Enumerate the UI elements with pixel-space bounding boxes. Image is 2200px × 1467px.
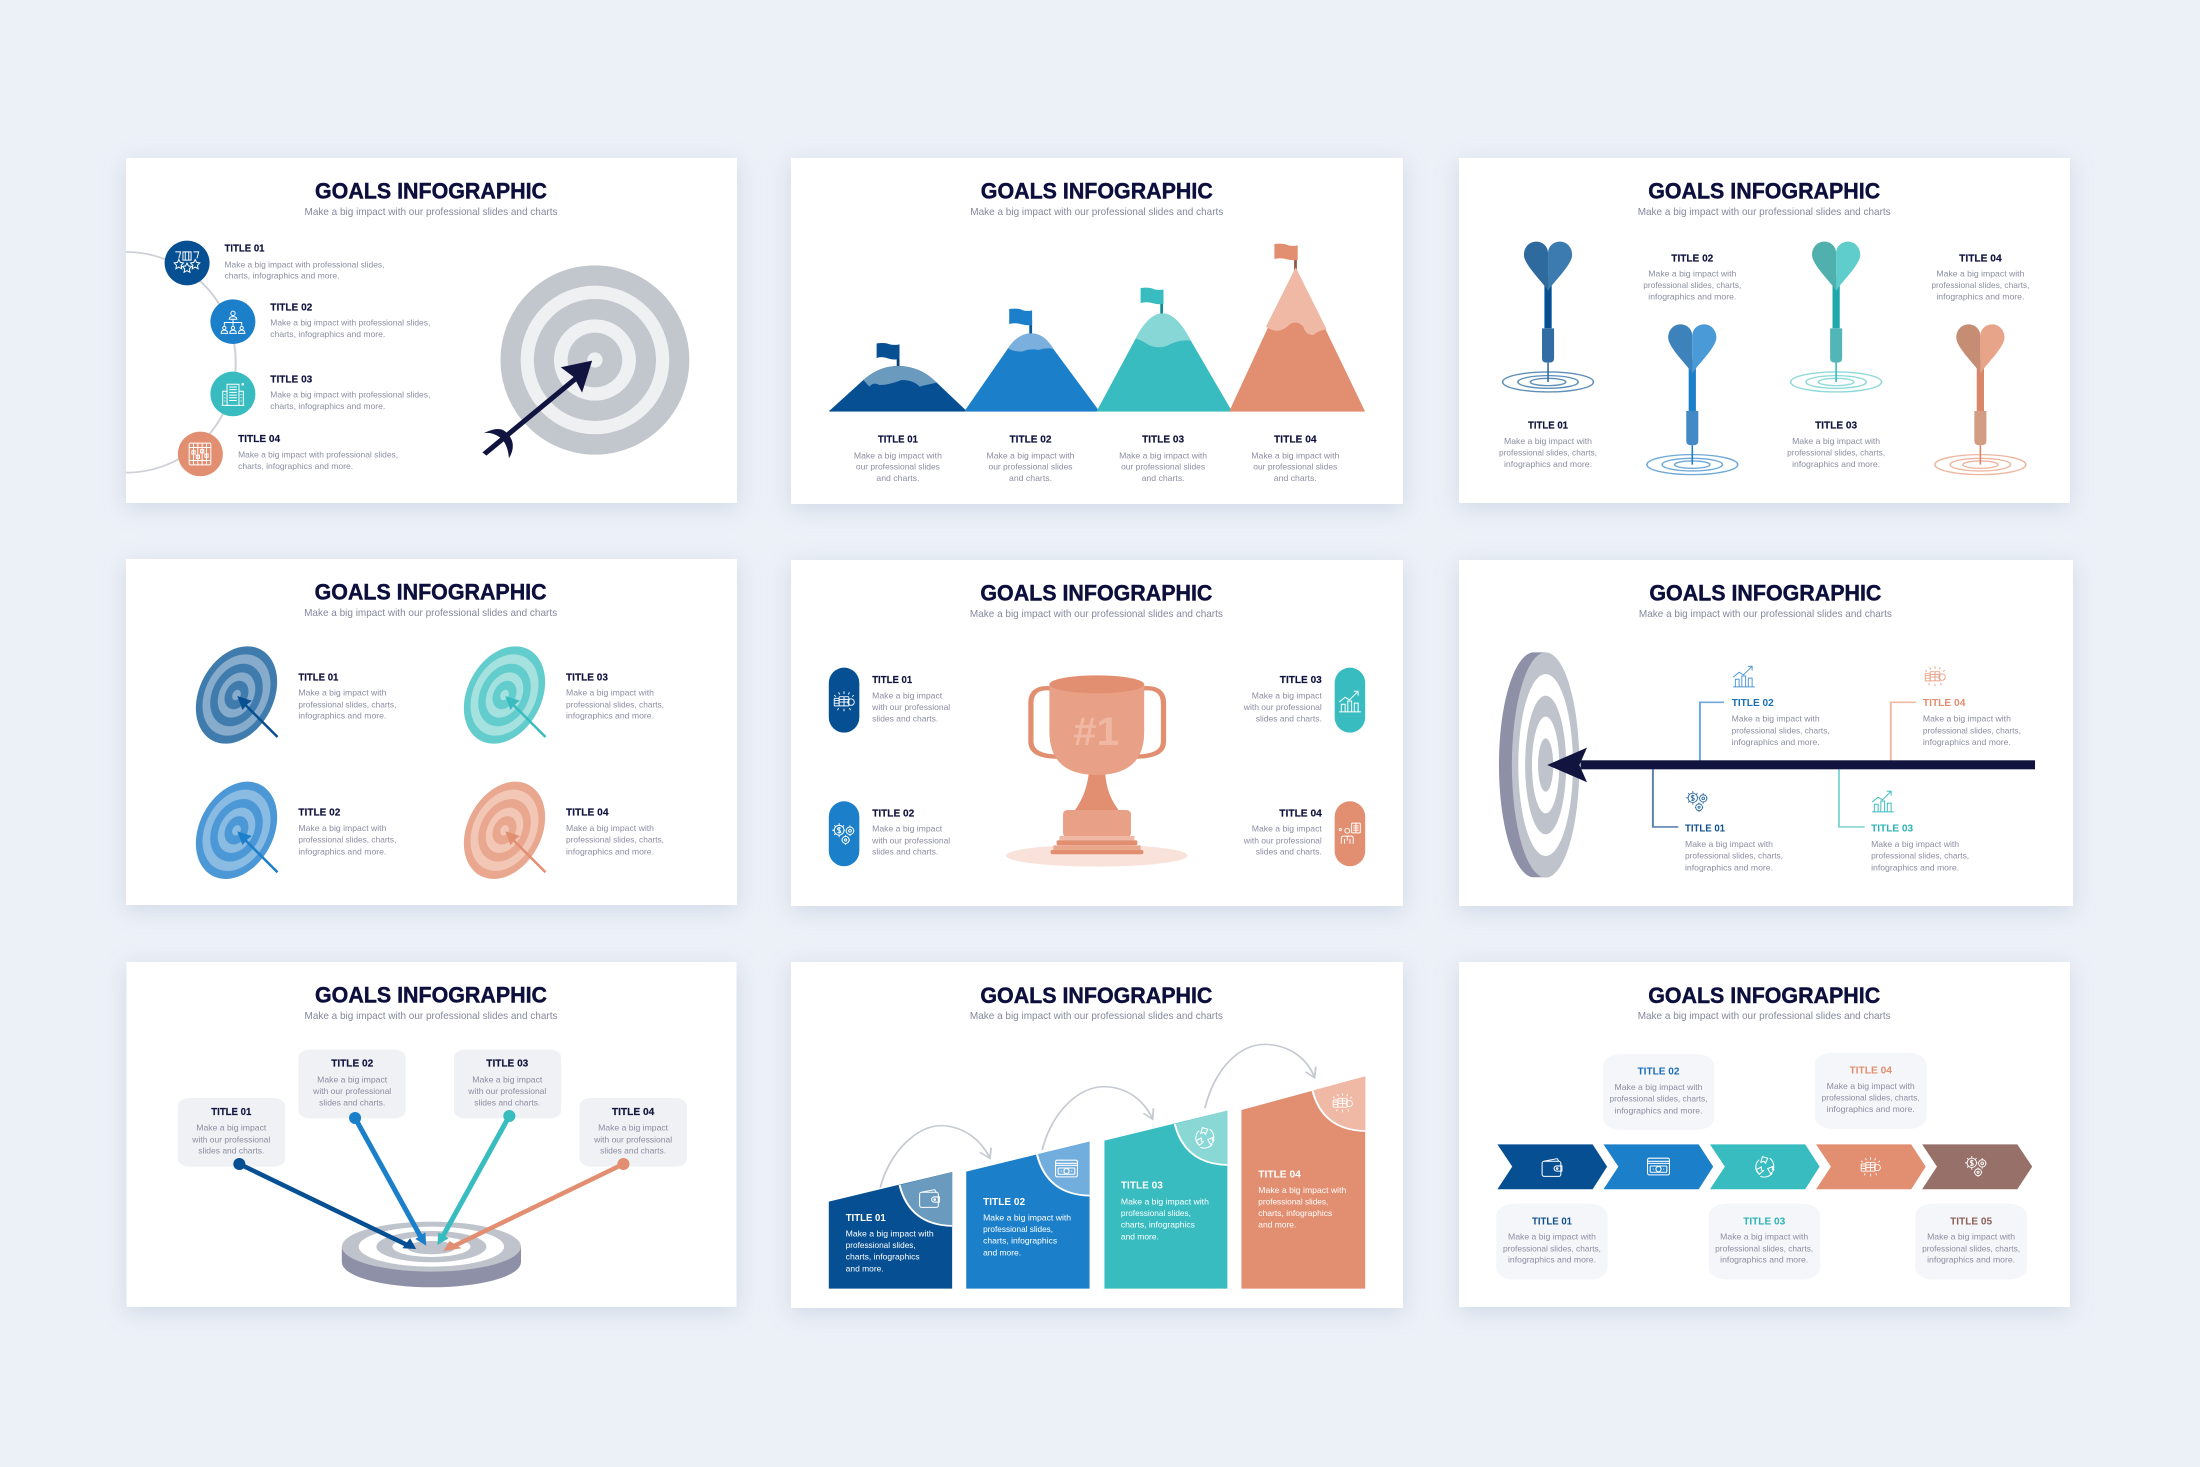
text: title 04: with our professional	[593, 1135, 672, 1144]
text: title 02	[986, 435, 1075, 483]
text: title 02: professional slides, charts,	[1732, 726, 1830, 735]
text: title 02: professional slides, charts,	[1643, 281, 1741, 290]
text: title 03: TITLE 03	[1142, 435, 1184, 446]
text: title 03: Make a big impact with professional slides,	[270, 391, 430, 400]
text: title 02: slides and charts.	[319, 1098, 385, 1107]
icon: coins	[1333, 1093, 1352, 1112]
text: title 03: slides and charts.	[474, 1098, 540, 1107]
text: title 04: Make a big impact with	[1251, 451, 1340, 460]
text: title 01: TITLE 01	[211, 1107, 252, 1118]
icon: gears navy	[1686, 791, 1707, 812]
text: title 04	[1822, 1065, 1920, 1114]
text: title 05: professional slides, charts,	[1922, 1244, 2020, 1253]
target 2	[180, 767, 293, 893]
target 3	[448, 632, 561, 758]
subheading: Make a big impact with our professional slides and charts	[1638, 1010, 1891, 1022]
icon: chart blue	[1733, 666, 1755, 687]
text: title 04: infographics and more.	[566, 847, 654, 856]
text: title 03: TITLE 03	[566, 672, 608, 683]
text: title 02: our professional slides	[988, 463, 1072, 472]
text: title 02: TITLE 02	[1732, 698, 1774, 709]
heading: GOALS INFOGRAPHIC	[980, 581, 1212, 606]
text: title 03: with our professional	[1243, 703, 1322, 712]
text: title 02	[1732, 698, 1830, 747]
subheading: Make a big impact with our professional slides and charts	[304, 1010, 558, 1022]
subheading: Make a big impact with our professional slides and charts	[304, 206, 558, 218]
text: title 03: Make a big impact with	[1792, 437, 1881, 446]
icon: abacus	[189, 443, 211, 465]
panel: tilted targets	[126, 559, 737, 905]
text: title 04: infographics and more.	[1827, 1105, 1915, 1114]
text: title 05: TITLE 05	[1950, 1216, 1992, 1227]
icon: person	[1339, 823, 1360, 844]
text: title 01: professional slides, charts,	[1503, 1244, 1601, 1253]
text: title 02: TITLE 02	[983, 1197, 1025, 1208]
panel: trophy	[791, 560, 1403, 906]
subheading: Make a big impact with our professional slides and charts	[1638, 206, 1891, 218]
text: title 04: Make a big impact with	[1258, 1186, 1347, 1195]
text: title 02: Make a big impact with	[1614, 1083, 1703, 1092]
icon: coins	[834, 691, 854, 711]
icon: coins orange	[1925, 666, 1945, 686]
text: title 01: slides and charts.	[198, 1147, 264, 1156]
text: title 02: TITLE 02	[331, 1059, 374, 1070]
heading: GOALS INFOGRAPHIC	[1648, 983, 1880, 1008]
text: title 04: TITLE 04	[238, 434, 280, 445]
text: title 03: TITLE 03	[486, 1059, 529, 1070]
text: title 02: Make a big impact	[317, 1076, 388, 1085]
text: title 04	[1251, 435, 1340, 483]
text: title 02: TITLE 02	[872, 808, 915, 819]
text: title 03: Make a big impact	[1252, 691, 1323, 700]
text: title 01	[871, 675, 950, 723]
text: title 02: slides and charts.	[872, 848, 938, 857]
text: title 05	[1922, 1216, 2020, 1265]
text: title 01: our professional slides	[856, 463, 940, 472]
text: title 02	[298, 808, 396, 856]
text: title 02: charts, infographics and more.	[270, 330, 385, 339]
text: title 03	[1715, 1216, 1813, 1265]
text: title 03: infographics and more.	[1871, 863, 1959, 872]
heading: GOALS INFOGRAPHIC	[315, 580, 547, 605]
text: title 02: Make a big impact	[872, 825, 943, 834]
text: title 01: infographics and more.	[1504, 460, 1592, 469]
icon: medals	[174, 252, 200, 272]
chevrons and text boxes	[1496, 1053, 2032, 1280]
icon: building	[222, 383, 244, 405]
text: title 01: Make a big impact with professional slides,	[224, 260, 384, 269]
text: title 04: Make a big impact with	[1827, 1082, 1915, 1091]
text: title 01: and more.	[846, 1264, 884, 1273]
text: title 02: Make a big impact with	[1648, 270, 1737, 279]
text: title 04	[1243, 808, 1323, 857]
text: title 04: professional slides, charts,	[1923, 726, 2021, 735]
text: title 01: professional slides, charts,	[298, 700, 396, 709]
heading: GOALS INFOGRAPHIC	[315, 983, 547, 1008]
text: title 03: TITLE 03	[1815, 420, 1857, 431]
mountains chart with flags	[829, 244, 1365, 412]
text: title 03: professional slides,	[1121, 1209, 1191, 1218]
text: title 03: charts, infographics and more.	[270, 402, 385, 411]
text: title 03: and more.	[1121, 1232, 1159, 1241]
trophy label: #1	[1073, 710, 1119, 754]
text: title 03: infographics and more.	[566, 712, 654, 721]
text: title 04: professional slides, charts,	[1931, 281, 2029, 290]
text: title 04	[1923, 698, 2021, 747]
text: title 01: TITLE 01	[1685, 824, 1725, 835]
text: title 03: professional slides, charts,	[1715, 1244, 1813, 1253]
text: title 04: TITLE 04	[1849, 1065, 1892, 1076]
text: title 02: TITLE 02	[1010, 435, 1052, 446]
text: title 01: Make a big impact	[196, 1124, 267, 1133]
panel: chevron process	[1459, 962, 2070, 1307]
text: title 03: professional slides, charts,	[1871, 852, 1969, 861]
text: title 03: Make a big impact with	[1871, 840, 1960, 849]
text: title 04	[566, 808, 664, 856]
text: title 04: Make a big impact with	[566, 824, 654, 833]
text: title 05: infographics and more.	[1927, 1256, 2015, 1265]
text: title 01: with our professional	[191, 1135, 270, 1144]
text: title 03: TITLE 03	[270, 374, 313, 385]
subheading: Make a big impact with our professional slides and charts	[970, 1010, 1223, 1022]
text: title 04: TITLE 04	[1959, 253, 2002, 264]
heading: GOALS INFOGRAPHIC	[980, 983, 1212, 1008]
icon: gears	[1965, 1156, 1986, 1177]
icon: money	[1056, 1160, 1077, 1177]
text: title 04: professional slides,	[1258, 1197, 1328, 1206]
panel: side target with long arrow	[1459, 560, 2073, 906]
text: title 04: charts, infographics and more.	[238, 462, 353, 471]
text: title 01: with our professional	[871, 703, 950, 712]
text: title 01	[191, 1107, 270, 1156]
text: title 04: TITLE 04	[1274, 435, 1317, 446]
text: title 02: Make a big impact with	[986, 451, 1075, 460]
text: title 03: Make a big impact with	[1121, 1197, 1209, 1206]
text: title 02: Make a big impact with professional slides,	[270, 319, 430, 328]
text: title 03: TITLE 03	[1280, 675, 1322, 686]
text: title 02	[983, 1197, 1072, 1257]
text: title 04: professional slides, charts,	[566, 836, 664, 845]
text: title 03	[270, 374, 430, 411]
text: title 01	[224, 243, 384, 281]
text: title 01: TITLE 01	[1528, 420, 1568, 431]
text: title 04: and charts.	[1274, 474, 1317, 483]
text: title 03	[467, 1059, 546, 1107]
text: title 01: TITLE 01	[224, 243, 265, 254]
text: title 03: professional slides, charts,	[1787, 448, 1885, 457]
text: title 04: and more.	[1258, 1221, 1296, 1230]
text: title 01: Make a big impact with	[298, 689, 387, 698]
text: title 03: TITLE 03	[1871, 824, 1913, 835]
heading: GOALS INFOGRAPHIC	[981, 179, 1213, 204]
text: title 02: with our professional	[312, 1087, 391, 1096]
text: title 04: TITLE 04	[612, 1107, 655, 1118]
text: title 01: TITLE 01	[1532, 1216, 1572, 1227]
subheading: Make a big impact with our professional slides and charts	[970, 206, 1223, 218]
text: title 02: with our professional	[871, 836, 950, 845]
text: title 02: infographics and more.	[1614, 1106, 1702, 1115]
text: title 01: professional slides, charts,	[1499, 448, 1597, 457]
text: title 02: and more.	[983, 1248, 1021, 1257]
icon: chart teal	[1872, 791, 1894, 812]
text: title 03: professional slides, charts,	[566, 700, 664, 709]
text: title 02: professional slides, charts,	[298, 836, 396, 845]
text: title 01: TITLE 01	[872, 675, 913, 686]
text: title 01: infographics and more.	[298, 712, 386, 721]
darts illustration	[1503, 242, 2026, 475]
text: title 04	[238, 434, 398, 471]
panel: mountains	[791, 158, 1403, 504]
text: title 03: with our professional	[467, 1087, 546, 1096]
icon: recycle	[1756, 1157, 1774, 1177]
text: title 03	[1243, 675, 1323, 723]
icon: money	[1648, 1158, 1669, 1175]
text: title 02	[1643, 253, 1741, 302]
text: title 02: Make a big impact with	[298, 824, 387, 833]
text: title 02: infographics and more.	[1732, 738, 1820, 747]
text: title 02: TITLE 02	[1638, 1066, 1680, 1077]
panel: arrows to flat target	[126, 962, 736, 1307]
heading: GOALS INFOGRAPHIC	[315, 179, 547, 204]
pills and trophy illustration	[829, 668, 1365, 867]
text: title 01: Make a big impact	[872, 691, 943, 700]
text: title 01: Make a big impact with	[854, 451, 942, 460]
text: title 02: TITLE 02	[298, 808, 341, 819]
heading: GOALS INFOGRAPHIC	[1648, 179, 1880, 204]
text: title 02	[270, 302, 430, 339]
subheading: Make a big impact with our professional slides and charts	[304, 607, 557, 619]
text: title 01: professional slides, charts,	[1685, 852, 1783, 861]
text: title 01: Make a big impact with	[1685, 840, 1773, 849]
text: title 02: professional slides,	[983, 1225, 1053, 1234]
text: title 03: and charts.	[1142, 474, 1185, 483]
text: title 04	[593, 1107, 672, 1156]
text: title 04: infographics and more.	[1936, 293, 2024, 302]
text: title 04	[1258, 1169, 1347, 1230]
text: title 04: slides and charts.	[1256, 848, 1322, 857]
panel: rising steps	[791, 962, 1403, 1308]
text: title 03: TITLE 03	[1121, 1181, 1163, 1192]
text: title 04: infographics and more.	[1923, 738, 2011, 747]
panel: darts	[1459, 158, 2070, 503]
text: title 02: Make a big impact with	[983, 1214, 1072, 1223]
text: title 02: infographics and more.	[1648, 293, 1736, 302]
text: title 01	[1685, 824, 1783, 872]
text: title 01: TITLE 01	[846, 1213, 886, 1224]
text: title 01	[1503, 1216, 1601, 1265]
text: title 01: professional slides,	[846, 1241, 916, 1250]
text: title 01: slides and charts.	[872, 714, 938, 723]
text: title 03: our professional slides	[1121, 463, 1205, 472]
text: title 04: Make a big impact	[1252, 825, 1323, 834]
text: title 01	[1499, 420, 1597, 469]
text: title 04: TITLE 04	[1279, 808, 1322, 819]
panel: goals with circled list and target	[126, 158, 737, 503]
text: title 01: infographics and more.	[1685, 863, 1773, 872]
text: title 03: infographics and more.	[1792, 460, 1880, 469]
text: title 01: TITLE 01	[878, 435, 918, 446]
target 1	[180, 632, 293, 758]
text: title 02: infographics and more.	[298, 847, 386, 856]
text: title 02: and charts.	[1009, 474, 1052, 483]
text: title 01: TITLE 01	[298, 672, 339, 683]
text: title 04	[1931, 253, 2029, 302]
text: title 02: charts, infographics	[983, 1237, 1057, 1246]
text: title 01: Make a big impact with	[846, 1230, 934, 1239]
icon: coins	[1861, 1157, 1880, 1176]
text: title 03: charts, infographics	[1121, 1221, 1195, 1230]
text: title 03	[1871, 824, 1969, 872]
heading: GOALS INFOGRAPHIC	[1649, 581, 1881, 606]
target with arrow	[484, 265, 689, 458]
steps and curved arrows	[829, 1044, 1365, 1289]
text: title 01	[854, 435, 942, 483]
icon: wallet	[1542, 1159, 1562, 1176]
icon: recycle	[1196, 1128, 1214, 1148]
text: title 01: charts, infographics and more.	[224, 272, 340, 281]
icon: org chart	[221, 311, 245, 333]
text: title 02: TITLE 02	[1671, 253, 1714, 264]
text: title 04: Make a big impact with professional slides,	[238, 451, 398, 460]
text: title 01: charts, infographics	[846, 1253, 920, 1262]
text: title 04: professional slides, charts,	[1822, 1094, 1920, 1103]
icon: chart	[1339, 691, 1361, 712]
text: title 04: Make a big impact	[598, 1124, 669, 1133]
text: title 04: charts, infographics	[1258, 1209, 1332, 1218]
text: title 01: Make a big impact with	[1504, 437, 1592, 446]
text: title 02: Make a big impact with	[1732, 715, 1820, 724]
text: title 03	[566, 672, 664, 721]
text: title 01: and charts.	[876, 474, 919, 483]
text: title 03	[1121, 1181, 1209, 1241]
text: title 01: Make a big impact with	[1508, 1233, 1596, 1242]
text: title 04: TITLE 04	[1923, 698, 1966, 709]
text: title 02: TITLE 02	[270, 302, 313, 313]
text: title 02	[1610, 1066, 1708, 1115]
subheading: Make a big impact with our professional slides and charts	[1639, 608, 1892, 620]
text: title 04: slides and charts.	[600, 1147, 666, 1156]
text: title 03: TITLE 03	[1743, 1216, 1786, 1227]
text: title 02	[312, 1059, 391, 1107]
text: title 03: slides and charts.	[1256, 714, 1322, 723]
text: title 03: Make a big impact	[472, 1076, 543, 1085]
text: title 03	[1787, 420, 1885, 469]
text: title 05: Make a big impact with	[1927, 1233, 2016, 1242]
text: title 01	[298, 672, 396, 721]
text: title 01: infographics and more.	[1508, 1256, 1596, 1265]
text: title 04: with our professional	[1243, 836, 1322, 845]
text: title 04: our professional slides	[1253, 463, 1337, 472]
side target, connectors and arrow	[1499, 652, 2035, 878]
text: title 04: Make a big impact with	[1936, 270, 2025, 279]
boxes, target and arrows	[178, 1050, 687, 1287]
icon: wallet	[920, 1190, 939, 1207]
text: title 03: infographics and more.	[1720, 1256, 1808, 1265]
icon: gears	[832, 823, 854, 845]
target 4	[448, 767, 561, 893]
text: title 03: Make a big impact with	[1119, 451, 1208, 460]
text: title 03: Make a big impact with	[1720, 1233, 1809, 1242]
text: title 04: TITLE 04	[1258, 1169, 1301, 1180]
curved connector with circles	[126, 241, 255, 476]
text: title 03	[1119, 435, 1208, 483]
text: title 02: professional slides, charts,	[1610, 1095, 1708, 1104]
subheading: Make a big impact with our professional slides and charts	[970, 608, 1223, 620]
text: title 02	[871, 808, 950, 857]
text: title 04: Make a big impact with	[1923, 715, 2011, 724]
text: title 04: TITLE 04	[566, 808, 609, 819]
text: title 01	[846, 1213, 934, 1273]
text: title 03: Make a big impact with	[566, 689, 654, 698]
